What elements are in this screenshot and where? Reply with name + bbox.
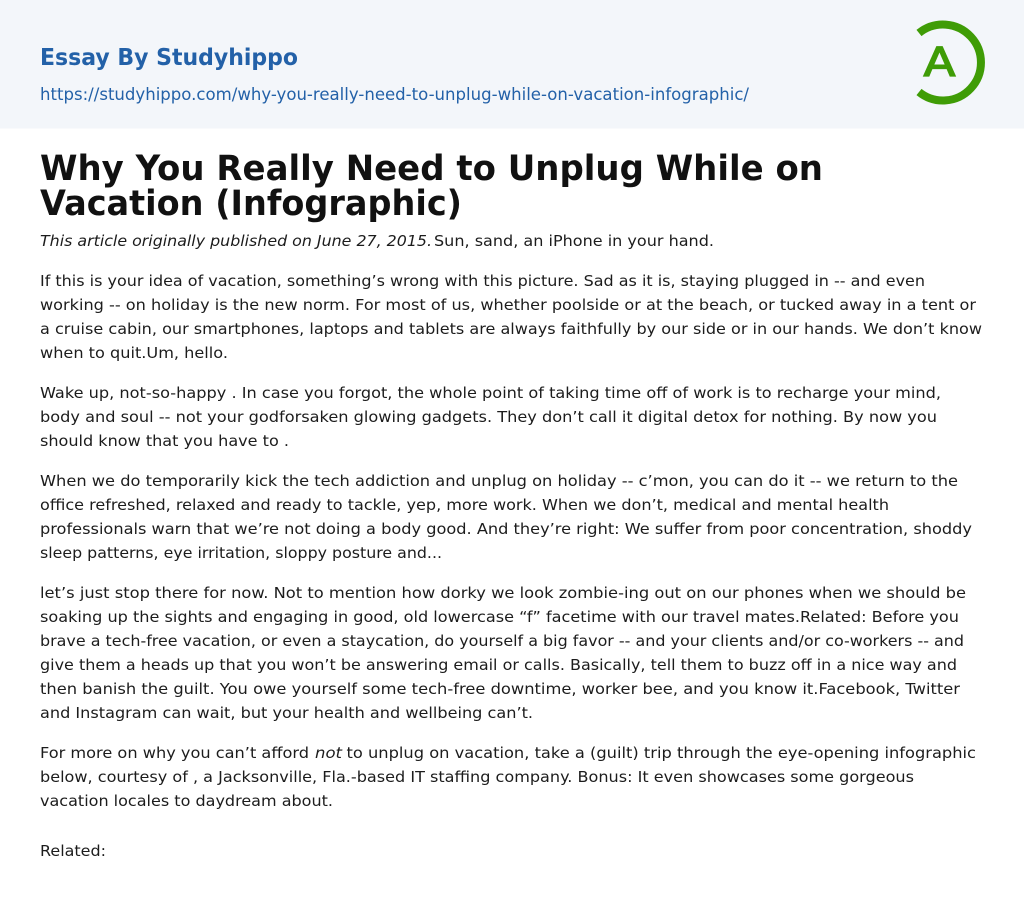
site name heading: Essay By Studyhippo bbox=[40, 45, 298, 71]
paragraph 5 bbox=[40, 744, 976, 810]
paragraph 4: give them a heads up that you won’t be answering email or calls. Basically, tell them to buzz off in a nice way and bbox=[40, 656, 957, 674]
title bbox=[40, 149, 823, 224]
title: Vacation (Infographic) bbox=[40, 184, 462, 224]
paragraph 3 bbox=[40, 472, 972, 562]
intro line: Sun, sand, an iPhone in your hand. bbox=[434, 232, 714, 250]
source url: https://studyhippo.com/why-you-really-need-to-unplug-while-on-vacation-infographic/ bbox=[40, 85, 749, 104]
paragraph 4: soaking up the sights and engaging in good, old lowercase “f” facetime with our travel mates.Related: Before you bbox=[40, 608, 959, 626]
paragraph 2 bbox=[40, 384, 941, 450]
paragraph 1: If this is your idea of vacation, something’s wrong with this picture. Sad as it is, staying plugged in -- and even bbox=[40, 272, 925, 290]
paragraph 2: body and soul -- not your godforsaken glowing gadgets. They don’t call it digital detox for nothing. By now you bbox=[40, 408, 937, 426]
related label: Related: bbox=[40, 842, 106, 860]
paragraph 1: when to quit.Um, hello. bbox=[40, 344, 228, 362]
paragraph 3: sleep patterns, eye irritation, sloppy posture and... bbox=[40, 544, 442, 562]
paragraph 2: should know that you have to . bbox=[40, 432, 289, 450]
paragraph 4: let’s just stop there for now. Not to mention how dorky we look zombie-ing out on our phones when we should be bbox=[40, 584, 966, 602]
icon: logo bbox=[919, 24, 981, 100]
paragraph 1: working -- on holiday is the new norm. For most of us, whether poolside or at the beach, or tucked away in a tent or bbox=[40, 296, 977, 314]
paragraph 2: Wake up, not-so-happy . In case you forgot, the whole point of taking time off of work is to recharge your mind, bbox=[40, 384, 941, 402]
icon: logo: A bbox=[924, 40, 956, 86]
paragraph 1 bbox=[40, 272, 982, 362]
paragraph 3: professionals warn that we’re not doing a body good. And they’re right: We suffer from poor concentration, shoddy bbox=[40, 520, 972, 538]
paragraph 5: below, courtesy of , a Jacksonville, Fla.-based IT staffing company. Bonus: It even showcases some gorgeous bbox=[40, 768, 914, 786]
paragraph 4: then banish the guilt. You owe yourself some tech-free downtime, worker bee, and you know it.Facebook, Twitter bbox=[40, 680, 961, 698]
paragraph 5: vacation locales to daydream about. bbox=[40, 792, 333, 810]
intro line: This article originally published on June 27, 2015. bbox=[40, 232, 432, 250]
title: Why You Really Need to Unplug While on bbox=[40, 149, 823, 189]
paragraph 5: to unplug on vacation, take a (guilt) trip through the eye-opening infographic bbox=[346, 744, 976, 762]
paragraph 5: For more on why you can’t afford bbox=[40, 744, 309, 762]
paragraph 1: a cruise cabin, our smartphones, laptops and tablets are always faithfully by our side or in our hands. We don’t know bbox=[40, 320, 982, 338]
paragraph 4: and Instagram can wait, but your health and wellbeing can’t. bbox=[40, 704, 533, 722]
paragraph 4: brave a tech-free vacation, or even a staycation, do yourself a big favor -- and your clients and/or co-workers -- and bbox=[40, 632, 964, 650]
header band bbox=[0, 0, 1024, 128]
paragraph 4 bbox=[40, 584, 966, 722]
paragraph 3: office refreshed, relaxed and ready to tackle, yep, more work. When we don’t, medical and mental health bbox=[40, 496, 889, 514]
paragraph 3: When we do temporarily kick the tech addiction and unplug on holiday -- c’mon, you can do it -- we return to the bbox=[40, 472, 958, 490]
paragraph 5: not bbox=[315, 744, 343, 762]
intro line bbox=[40, 232, 714, 250]
